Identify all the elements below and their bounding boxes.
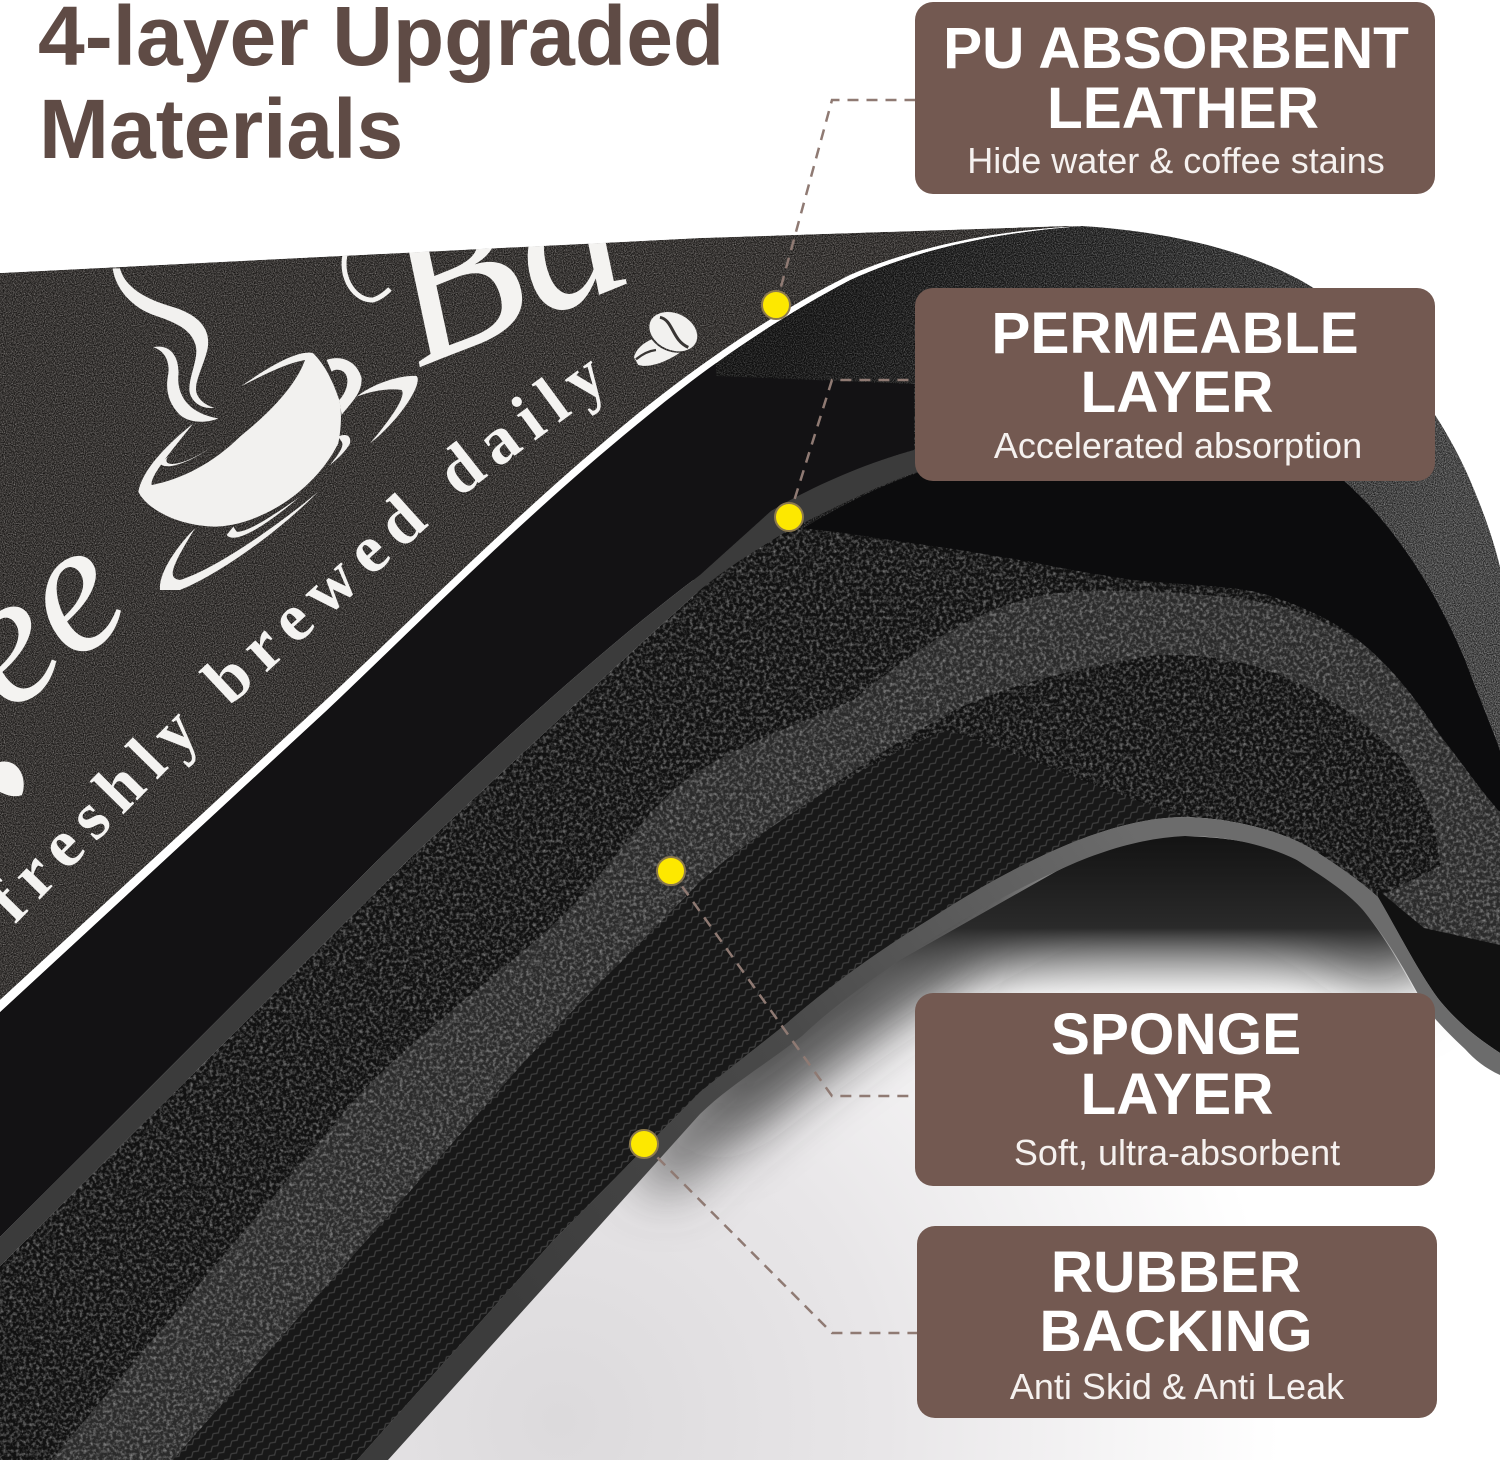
callout: rubber backing: RUBBER bbox=[1051, 1240, 1301, 1305]
steam small bbox=[153, 347, 218, 422]
callout: permeable layer: Accelerated absorption bbox=[994, 425, 1362, 466]
script tail bbox=[0, 761, 24, 796]
connector: rubber bbox=[644, 1144, 917, 1333]
callout: permeable layer: LAYER bbox=[1081, 360, 1273, 425]
white border line of top layer bbox=[0, 226, 1082, 1012]
callout: sponge layer: LAYER bbox=[1081, 1062, 1273, 1127]
sponge dark body bbox=[0, 527, 1500, 1460]
script word fragment: Ba: Ba bbox=[346, 101, 657, 412]
callout: permeable layer bbox=[915, 288, 1435, 481]
black wedge under sponge end bbox=[1378, 890, 1500, 1053]
heading: Materials bbox=[39, 82, 403, 176]
steam large bbox=[113, 268, 215, 408]
rubber backing mesh bbox=[173, 730, 1185, 1460]
marker: sponge bbox=[657, 857, 685, 885]
cup body bbox=[138, 353, 341, 527]
cup inner arc bbox=[160, 440, 222, 466]
marker: leather bbox=[762, 291, 790, 319]
leather layer underside rim bbox=[640, 226, 1500, 830]
PU leather printed surface bbox=[0, 226, 1078, 1000]
callout: PU absorbent leather: PU ABSORBENT bbox=[943, 16, 1409, 81]
heading bbox=[38, 0, 724, 176]
connector: permeable bbox=[789, 380, 915, 517]
callout: rubber backing: Anti Skid & Anti Leak bbox=[1010, 1366, 1345, 1407]
connector: sponge bbox=[671, 871, 915, 1096]
sponge layer bbox=[0, 527, 1500, 1460]
callout: PU absorbent leather: Hide water & coffee stains bbox=[967, 140, 1385, 181]
connector: leather bbox=[776, 100, 915, 305]
callout: sponge layer: Soft, ultra-absorbent bbox=[1014, 1132, 1340, 1173]
coffee cup icon bbox=[113, 268, 418, 590]
rubber backing grey edge band bbox=[357, 817, 1500, 1460]
floor shadow under mat bbox=[0, 850, 1500, 1460]
callout: PU absorbent leather bbox=[915, 2, 1435, 194]
saucer small right bbox=[330, 435, 350, 465]
saucer bottom bbox=[160, 492, 318, 590]
marker: rubber bbox=[630, 1130, 658, 1158]
coffee bean icon bbox=[634, 312, 698, 366]
marker: permeable bbox=[775, 503, 803, 531]
callout: sponge layer: SPONGE bbox=[1051, 1002, 1301, 1067]
callout: rubber backing: BACKING bbox=[1040, 1299, 1312, 1364]
permeable layer grey edge strip bbox=[0, 440, 960, 1266]
saucer right bbox=[357, 376, 418, 443]
callout: PU absorbent leather: LEATHER bbox=[1047, 76, 1319, 141]
cup handle bbox=[327, 358, 362, 415]
saucer small bottom bbox=[227, 497, 300, 538]
callout: permeable layer: PERMEABLE bbox=[991, 301, 1359, 366]
sponge lighter cross section bbox=[51, 591, 1500, 1460]
callout: rubber backing bbox=[917, 1226, 1437, 1418]
permeable layer black band bbox=[0, 360, 914, 1237]
black interior of permeable layer bbox=[800, 462, 1500, 830]
callout: sponge layer bbox=[915, 993, 1435, 1186]
script swash bbox=[344, 255, 390, 300]
rubber backing seen under arch bbox=[840, 836, 1424, 1010]
